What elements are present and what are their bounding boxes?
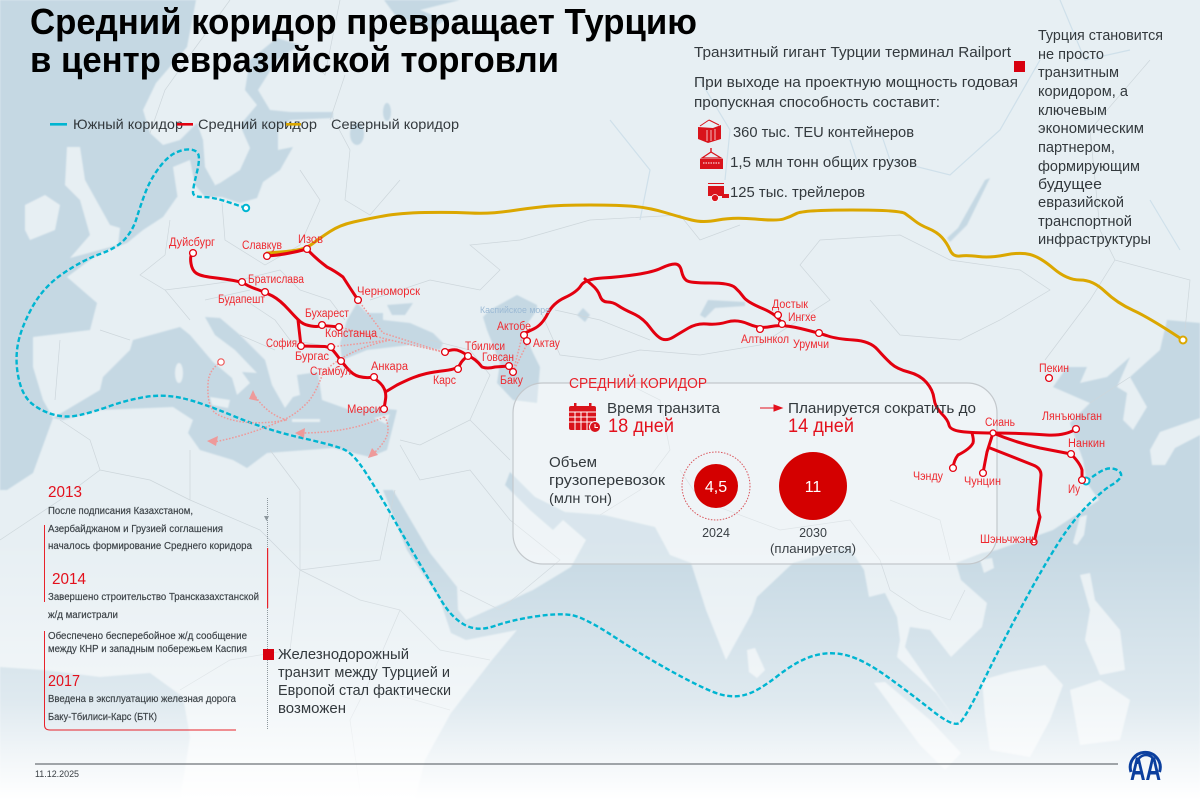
- city labels: Стамбул: [310, 366, 351, 378]
- text block: Turkey as partner: будущее: [1038, 177, 1102, 193]
- panel contents: transit time and freight volume: [549, 374, 976, 556]
- text block: Turkey as partner: партнером,: [1038, 140, 1115, 156]
- timeline: началось формирование Среднего коридора: [48, 540, 252, 552]
- legend: Северный коридор: [331, 116, 459, 132]
- text block: Railport terminal: Транзитный гигант Турции терминал Railport: [694, 45, 1011, 61]
- city labels: Братислава: [248, 274, 305, 286]
- city labels: Бухарест: [305, 308, 350, 320]
- station markers: [190, 246, 1085, 545]
- bubble 2024: 2024: [702, 526, 730, 540]
- city labels: Изов: [298, 234, 323, 246]
- text block: Railport terminal: 360 тыс. TEU контейнеров: [733, 125, 914, 141]
- city labels: Алтынкол: [741, 334, 789, 346]
- timeline axis and rail transit note: [263, 498, 451, 730]
- city labels: Иу: [1068, 484, 1080, 496]
- arrow: [760, 405, 782, 411]
- logo: AA: [1130, 751, 1161, 787]
- text block: Turkey as partner: формирующим: [1038, 159, 1140, 175]
- timeline: Завершено строительство Трансказахстанской: [48, 592, 259, 603]
- city labels: София: [266, 338, 297, 350]
- city labels: Нанкин: [1068, 438, 1105, 450]
- timeline: между КНР и западным побережьем Каспия: [48, 643, 247, 655]
- bubble 2030: 11: [805, 479, 821, 496]
- city labels: Тбилиси: [465, 341, 505, 353]
- title: в центр евразийской торговли: [30, 39, 559, 80]
- city labels: Чэнду: [913, 471, 943, 483]
- text block: Turkey as partner: Турция становится: [1038, 28, 1163, 44]
- bubble 2030: [770, 452, 856, 556]
- city labels: Анкара: [371, 361, 409, 373]
- footer: 11.12.2025: [35, 769, 79, 780]
- city labels: Будапешт: [218, 294, 266, 306]
- city labels: Достык: [772, 299, 809, 311]
- city labels: Баку: [500, 375, 523, 387]
- middle corridor route: [191, 249, 1082, 542]
- bubble 2030: (планируется): [770, 542, 856, 556]
- timeline: 2013: [48, 484, 82, 501]
- timeline: Баку-Тбилиси-Карс (БТК): [48, 711, 157, 723]
- city labels: [169, 234, 1105, 546]
- timeline: 2017: [48, 673, 80, 690]
- text block: Railport terminal: пропускная способность составит:: [694, 95, 940, 111]
- north corridor route: [267, 205, 1186, 344]
- text block: Railport terminal: [694, 45, 1018, 202]
- text block: Turkey as partner: инфраструктуры: [1038, 232, 1151, 248]
- panel contents: transit time and freight volume: 18 дней: [608, 416, 674, 437]
- city labels: Чунцин: [964, 476, 1001, 488]
- title: [30, 1, 697, 80]
- panel contents: transit time and freight volume: СРЕДНИЙ КОРИДОР: [569, 374, 707, 392]
- timeline axis and rail transit note: Европой стал фактически: [278, 683, 451, 699]
- legend: [50, 116, 459, 132]
- icon: general cargo: [700, 148, 723, 169]
- text block: Railport terminal: При выходе на проектную мощность годовая: [694, 75, 1018, 91]
- logo: AA: AA: [1130, 751, 1161, 787]
- timeline axis and rail transit note: возможен: [278, 701, 346, 717]
- legend: Южный коридор: [73, 116, 183, 132]
- city labels: Актобе: [497, 321, 531, 333]
- text block: Turkey as partner: ключевым: [1038, 103, 1107, 119]
- city labels: Лянъюньган: [1042, 411, 1102, 423]
- panel contents: transit time and freight volume: Планируется сократить до: [788, 401, 976, 417]
- text block: Turkey as partner: транспортной: [1038, 214, 1132, 230]
- south corridor route: [17, 149, 1121, 724]
- city labels: Ингхе: [788, 312, 816, 324]
- text block: Railport terminal: 1,5 млн тонн общих грузов: [730, 155, 917, 171]
- timeline: После подписания Казахстаном,: [48, 506, 193, 517]
- timeline: 2014: [52, 571, 86, 588]
- city labels: Пекин: [1039, 363, 1069, 375]
- bubble 2024: 4,5: [705, 479, 727, 496]
- sea routes dotted: [207, 300, 528, 458]
- city labels: Мерси: [347, 404, 381, 416]
- timeline: ж/д магистрали: [48, 610, 118, 621]
- panel contents: transit time and freight volume: грузоперевозок: [549, 473, 666, 489]
- city labels: Дуйсбург: [169, 237, 215, 249]
- timeline: Введена в эксплуатацию железная дорога: [48, 694, 236, 705]
- city labels: Сиань: [985, 417, 1015, 429]
- city labels: Говсан: [482, 352, 514, 364]
- legend: Средний коридор: [198, 116, 317, 132]
- panel contents: transit time and freight volume: Объем: [549, 455, 597, 471]
- city labels: Карс: [433, 375, 456, 387]
- panel contents: transit time and freight volume: Время транзита: [607, 401, 721, 417]
- city labels: Бургас: [295, 351, 329, 363]
- timeline: [44, 484, 259, 730]
- city labels: Констанца: [325, 328, 378, 340]
- timeline: Обеспечено бесперебойное ж/д сообщение: [48, 630, 247, 642]
- timeline axis and rail transit note: Железнодорожный: [278, 647, 409, 663]
- timeline: Азербайджаном и Грузией соглашения: [48, 523, 223, 535]
- city labels: Шэньчжэнь: [980, 534, 1037, 546]
- title: Средний коридор превращает Турцию: [30, 1, 697, 42]
- text block: Turkey as partner: не просто: [1038, 47, 1104, 63]
- panel: Middle Corridor stats box: [513, 383, 997, 564]
- bubble 2024: [682, 452, 750, 540]
- panel contents: transit time and freight volume: (млн тон): [549, 491, 612, 506]
- icon: container: [698, 120, 721, 143]
- text block: Turkey as partner: [1014, 28, 1163, 248]
- icon: trailer: [708, 183, 729, 202]
- bubble 2030: 2030: [799, 526, 827, 540]
- panel contents: transit time and freight volume: 14 дней: [788, 416, 854, 437]
- city labels: Каспийское море: [480, 305, 550, 315]
- text block: Railport terminal: 125 тыс. трейлеров: [730, 185, 865, 201]
- city labels: Актау: [533, 338, 560, 350]
- icon: calendar: [569, 403, 600, 432]
- text block: Turkey as partner: экономическим: [1038, 121, 1144, 137]
- bullet: [1014, 61, 1025, 72]
- text block: Turkey as partner: евразийской: [1038, 195, 1124, 211]
- city labels: Черноморск: [357, 286, 421, 298]
- bullet: [263, 649, 274, 660]
- city labels: Славкув: [242, 240, 282, 252]
- text block: Turkey as partner: коридором, а: [1038, 84, 1129, 100]
- timeline axis and rail transit note: транзит между Турцией и: [278, 665, 450, 681]
- city labels: Урумчи: [793, 339, 829, 351]
- text block: Turkey as partner: транзитным: [1038, 65, 1119, 81]
